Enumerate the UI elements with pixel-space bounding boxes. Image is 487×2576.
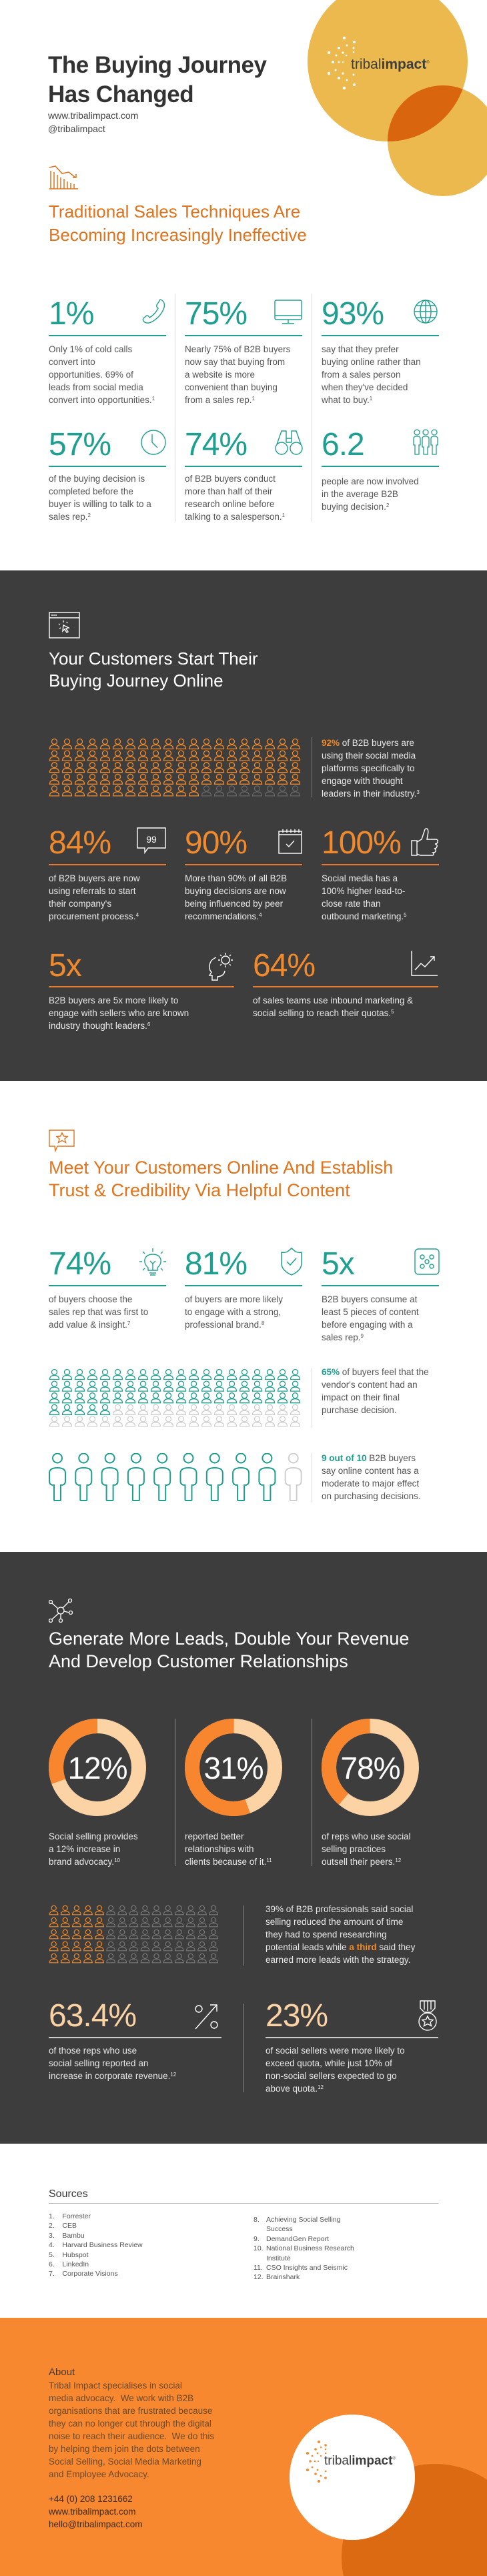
- sources list col 1: 3. Bambu: [49, 2232, 85, 2240]
- icon: declining chart: [49, 165, 78, 189]
- header circles: [308, 0, 487, 196]
- sources list col 2: Brainshark: [266, 2273, 300, 2281]
- text 39%: 39% of B2B professionals said social: [266, 1904, 413, 1914]
- stat 1%: [49, 296, 166, 405]
- text 92%: 92% of B2B buyers are: [322, 738, 414, 748]
- text 9 out of 10: say online content has a: [322, 1466, 419, 1476]
- stat 5x content: sales rep.9: [322, 1332, 364, 1342]
- logo footer: tribalimpact®: [324, 2454, 396, 2468]
- stat 23%: above quota.12: [266, 2084, 324, 2094]
- text 65%: purchase decision.: [322, 1405, 397, 1415]
- donut 31%: relationships with: [185, 1844, 254, 1854]
- stat 23%: 23%: [266, 1998, 328, 2034]
- stat 5x content: least 5 pieces of content: [322, 1307, 419, 1317]
- donut 78%: 78%: [340, 1751, 400, 1785]
- stat 74% buyers: of buyers choose the: [49, 1294, 132, 1304]
- stat 100%: 100% higher lead-to-: [322, 886, 405, 896]
- text 92%: using their social media: [322, 751, 416, 761]
- stat 23%: of social sellers were more likely to: [266, 2046, 405, 2056]
- text 39%: [266, 1904, 415, 1965]
- about text: they can no longer cut through the digital: [49, 2419, 211, 2429]
- text 39%: earned more leads with the strategy.: [266, 1955, 410, 1965]
- heading: traditional sales: Becoming Increasingly Ineffective: [49, 225, 307, 245]
- text 65%: vendor's content had an: [322, 1380, 418, 1390]
- heading: traditional sales: [49, 201, 307, 245]
- stat 5x: engage with sellers who are known: [49, 1008, 189, 1018]
- stat 5x content: B2B buyers consume at: [322, 1294, 417, 1304]
- title: Has Changed: [48, 81, 193, 107]
- text 39%: they had to spend researching: [266, 1929, 387, 1940]
- sources list col 2: Institute: [266, 2254, 291, 2262]
- stat 57%: of the buying decision is: [49, 474, 145, 484]
- stat 6.2: in the average B2B: [322, 489, 398, 499]
- donut 31%: clients because of it.11: [185, 1857, 272, 1867]
- stat 57%: 57%: [49, 427, 111, 462]
- panel: section 1 stats: [175, 294, 312, 522]
- sources heading: Sources: [49, 2188, 88, 2200]
- stat 84%: [49, 825, 166, 921]
- stat 1%: leads from social media: [49, 382, 143, 392]
- stat 5x: industry thought leaders.6: [49, 1021, 150, 1031]
- stat 90%: recommendations.4: [185, 911, 262, 921]
- sources list col 2: 8.: [254, 2216, 260, 2224]
- text 65%: impact on their final: [322, 1392, 400, 1402]
- about text: organisations that are frustrated because: [49, 2406, 212, 2416]
- about text: [49, 2379, 214, 2481]
- panel: section 4 dark: [0, 1552, 487, 2144]
- stat 1%: opportunities. 69% of: [49, 370, 133, 380]
- stat 74%: more than half of their: [185, 486, 272, 496]
- stat 75%: now say that buying from: [185, 357, 285, 367]
- about text: Social Selling, Social Media Marketing: [49, 2457, 201, 2467]
- heading: meet customers online: Trust & Credibility Via Helpful Content: [49, 1180, 350, 1200]
- text 65%: [322, 1367, 429, 1415]
- about text: Tribal Impact specialises in social: [49, 2381, 182, 2391]
- text 92%: leaders in their industry.3: [322, 789, 420, 799]
- stat 90%: [185, 825, 302, 921]
- stat 84%: 99: [146, 834, 157, 845]
- donut 12%: Social selling provides: [49, 1831, 138, 1841]
- stat 64%: 64%: [253, 948, 315, 983]
- stat 1%: convert into: [49, 357, 95, 367]
- panel: footer: [0, 2318, 487, 2576]
- sources list col 2: Success: [266, 2225, 293, 2233]
- heading: generate more leads: [49, 1629, 409, 1671]
- sources list col 2: National Business Research: [266, 2244, 354, 2252]
- stat 81%: to engage with a strong,: [185, 1307, 281, 1317]
- donut 78%: of reps who use social: [322, 1831, 411, 1841]
- contact details: hello@tribalimpact.com: [49, 2519, 143, 2529]
- stat 84%: 84%: [49, 825, 111, 861]
- stat 93%: buying online rather than: [322, 357, 421, 367]
- stat 74% buyers: 74%: [49, 1246, 111, 1282]
- stat 6.2: [322, 427, 439, 512]
- title: The Buying Journey: [48, 52, 266, 78]
- stat 23%: exceed quota, while just 10% of: [266, 2058, 392, 2068]
- contact details: +44 (0) 208 1231662: [49, 2494, 133, 2504]
- stat 74% buyers: sales rep that was first to: [49, 1307, 148, 1317]
- donut 78%: [322, 1719, 419, 1867]
- stat 5x: [49, 948, 234, 1031]
- stat 64%: of sales teams use inbound marketing &: [253, 995, 413, 1005]
- stat 63.4%: increase in corporate revenue.12: [49, 2071, 176, 2081]
- sources list col 1: 6. LinkedIn: [49, 2260, 89, 2268]
- heading: generate more leads: Generate More Leads, Double Your Revenue: [49, 1629, 409, 1649]
- contact details: www.tribalimpact.com: [49, 2507, 136, 2517]
- donut 78%: selling practices: [322, 1844, 386, 1854]
- stat 5x content: 5x: [322, 1246, 354, 1282]
- heading: meet customers online: [49, 1158, 393, 1200]
- stat 6.2: buying decision.2: [322, 502, 389, 512]
- stat 74%: [185, 427, 303, 522]
- stat 100%: outbound marketing.5: [322, 911, 407, 921]
- stat 57%: buyer is willing to talk to a: [49, 499, 151, 509]
- stat 6.2: 6.2: [322, 427, 364, 462]
- stat 63.4%: social selling reported an: [49, 2058, 148, 2068]
- stat 1%: 1%: [49, 296, 93, 332]
- stat 100%: 100%: [322, 825, 401, 861]
- stat 81%: professional brand.8: [185, 1320, 264, 1330]
- stat 64%: [253, 948, 438, 1018]
- stat 84%: of B2B buyers are now: [49, 873, 140, 883]
- about text: by helping them join the dots between: [49, 2444, 200, 2454]
- stat 90%: being influenced by peer: [185, 899, 283, 909]
- stat 75%: [185, 296, 302, 405]
- donut 31%: [185, 1719, 282, 1867]
- contact details: [49, 2493, 143, 2531]
- stat 5x content: before engaging with a: [322, 1320, 413, 1330]
- people grid 39%: [49, 1905, 218, 1963]
- icon: network: [49, 1599, 73, 1623]
- stat 74% buyers: add value & insight.7: [49, 1320, 130, 1330]
- donut 31%: reported better: [185, 1831, 244, 1841]
- stat 5x: B2B buyers are 5x more likely to: [49, 995, 178, 1005]
- stat 64%: social selling to reach their quotas.5: [253, 1008, 394, 1018]
- stat 6.2: people are now involved: [322, 476, 419, 486]
- stat 57%: completed before the: [49, 486, 133, 496]
- panel: section 2 dark: [0, 570, 487, 1081]
- sources list col 2: 11.: [254, 2264, 263, 2272]
- text 92%: [322, 738, 420, 799]
- stat 100%: [322, 825, 439, 921]
- text 39%: potential leads while a third said they: [266, 1942, 415, 1952]
- donut 12%: a 12% increase in: [49, 1844, 120, 1854]
- sources list col 2: Achieving Social Selling: [266, 2216, 340, 2224]
- stat 1%: Only 1% of cold calls: [49, 344, 132, 354]
- sources list col 2: [254, 2215, 387, 2282]
- stat 84%: their company's: [49, 899, 111, 909]
- donut 12%: brand advocacy.10: [49, 1857, 120, 1867]
- about text: media advocacy. We work with B2B: [49, 2393, 193, 2403]
- text 92%: engage with thought: [322, 776, 403, 786]
- donut 12%: 12%: [67, 1751, 127, 1785]
- stat 75%: Nearly 75% of B2B buyers: [185, 344, 290, 354]
- stat 81%: [185, 1246, 302, 1330]
- stat 93%: [322, 296, 439, 405]
- logo top: [327, 36, 430, 89]
- text 9 out of 10: [322, 1453, 421, 1501]
- text 92%: platforms specifically to: [322, 763, 415, 773]
- heading: customers start online: [49, 649, 258, 691]
- stat 23%: non-social sellers expected to go: [266, 2071, 397, 2081]
- people grid 92%: [49, 738, 300, 797]
- stat 57%: [49, 427, 166, 522]
- title: [48, 52, 267, 107]
- sources list col 1: 1. Forrester: [49, 2212, 91, 2220]
- about text: and Employee Advocacy.: [49, 2469, 149, 2479]
- stat 90%: buying decisions are now: [185, 886, 286, 896]
- people grid 65%: [49, 1369, 300, 1426]
- url / handle: www.tribalimpact.com: [48, 110, 138, 121]
- stat 5x content: [322, 1246, 440, 1342]
- heading: customers start online: Buying Journey Online: [49, 671, 223, 691]
- sources list col 1: 2. CEB: [49, 2222, 77, 2230]
- url / handle: [48, 110, 138, 134]
- stat 5x: 5x: [49, 948, 81, 983]
- stat 63.4%: [49, 1998, 221, 2081]
- sources list col 1: [49, 2212, 143, 2278]
- sources list col 1: 7. Corporate Visions: [49, 2270, 118, 2278]
- stat 74%: research online before: [185, 499, 274, 509]
- stat 81%: of buyers are more likely: [185, 1294, 283, 1304]
- donut 12%: [49, 1719, 146, 1867]
- donut 31%: 31%: [203, 1751, 264, 1785]
- about heading: About: [49, 2367, 75, 2378]
- stat 63.4%: 63.4%: [49, 1998, 136, 2034]
- stat 84%: using referrals to start: [49, 886, 136, 896]
- stat 74%: talking to a salesperson.1: [185, 512, 285, 522]
- stat 74%: of B2B buyers conduct: [185, 474, 276, 484]
- sources list col 2: 12.: [254, 2273, 264, 2281]
- stat 84%: procurement process.4: [49, 911, 139, 921]
- stat 23%: [266, 1998, 438, 2094]
- heading: generate more leads: And Develop Customer Relationships: [49, 1651, 348, 1671]
- icon: star speech bubble: [49, 1130, 75, 1152]
- url / handle: @tribalimpact: [48, 123, 105, 134]
- heading: traditional sales: Traditional Sales Techniques Are: [49, 201, 300, 222]
- icon: browser click: [49, 612, 80, 638]
- big people 9 of 10: [49, 1453, 302, 1501]
- heading: customers start online: Your Customers Start Their: [49, 649, 258, 669]
- sources list col 2: DemandGen Report: [266, 2235, 329, 2243]
- text 9 out of 10: moderate to major effect: [322, 1478, 419, 1488]
- stat 100%: close rate than: [322, 899, 381, 909]
- stat 81%: 81%: [185, 1246, 247, 1282]
- stat 93%: say that they prefer: [322, 344, 399, 354]
- logo footer: [304, 2438, 404, 2485]
- text 9 out of 10: 9 out of 10 B2B buyers: [322, 1453, 416, 1463]
- stat 75%: convenient than buying: [185, 382, 278, 392]
- logo top: tribalimpact®: [351, 57, 430, 72]
- stat 93%: what to buy.1: [322, 395, 372, 405]
- sources list col 1: 5. Hubspot: [49, 2251, 89, 2259]
- stat 90%: 90%: [185, 825, 247, 861]
- sources list col 2: 9.: [254, 2235, 260, 2243]
- stat 93%: when they've decided: [322, 382, 408, 392]
- stat 90%: More than 90% of all B2B: [185, 873, 287, 883]
- text 9 out of 10: on purchasing decisions.: [322, 1491, 421, 1501]
- sources list col 2: CSO Insights and Seismic: [266, 2264, 348, 2272]
- sources list col 2: 10.: [254, 2244, 264, 2252]
- sources list col 1: 4. Harvard Business Review: [49, 2241, 143, 2249]
- stat 93%: from a sales person: [322, 370, 401, 380]
- stat 75%: a website is more: [185, 370, 255, 380]
- stat 100%: Social media has a: [322, 873, 398, 883]
- text 39%: selling reduced the amount of time: [266, 1917, 403, 1927]
- stat 57%: sales rep.2: [49, 512, 91, 522]
- text 65%: 65% of buyers feel that the: [322, 1367, 429, 1377]
- donut 78%: outsell their peers.12: [322, 1857, 401, 1867]
- stat 74%: 74%: [185, 427, 247, 462]
- stat 75%: 75%: [185, 296, 247, 332]
- stat 75%: from a sales rep.1: [185, 395, 255, 405]
- stat 1%: convert into opportunities.1: [49, 395, 155, 405]
- stat 74% buyers: [49, 1246, 166, 1330]
- stat 93%: 93%: [322, 296, 384, 332]
- about text: noise to reach their audience. We do this: [49, 2431, 214, 2441]
- stat 63.4%: of those reps who use: [49, 2046, 137, 2056]
- heading: meet customers online: Meet Your Customers Online And Establish: [49, 1158, 393, 1178]
